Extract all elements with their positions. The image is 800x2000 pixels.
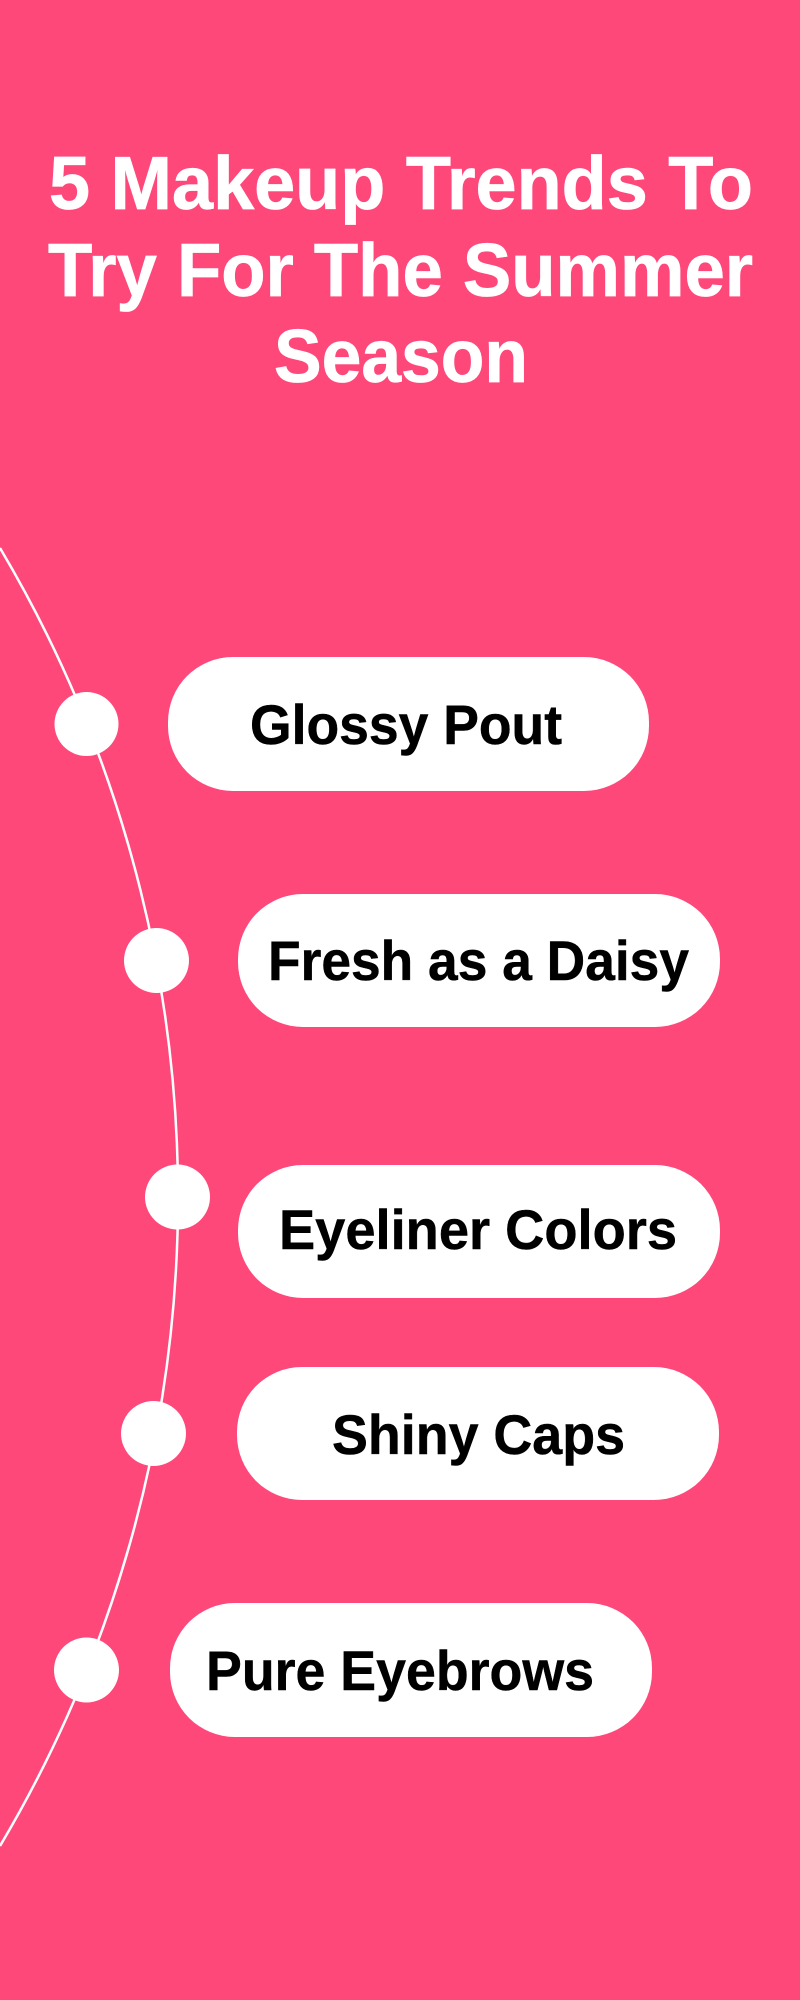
item 3: Eyeliner Colors [145, 1164, 720, 1298]
label 3: Eyeliner Colors [279, 1198, 677, 1261]
marker dot 2 [124, 928, 189, 993]
marker dot 3 [145, 1164, 210, 1230]
title: Try For The Summer [48, 228, 753, 312]
pill 1 [168, 657, 649, 791]
marker dot 1 [54, 692, 118, 756]
title: Season [274, 314, 528, 398]
label 1: Glossy Pout [250, 693, 562, 756]
label 4: Shiny Caps [332, 1403, 625, 1466]
item 4: Shiny Caps [121, 1367, 719, 1500]
marker dot 5 [54, 1638, 119, 1702]
title: 5 Makeup Trends To [49, 141, 753, 225]
item 2: Fresh as a Daisy [124, 894, 720, 1027]
curved timeline line [0, 548, 178, 1846]
label 2: Fresh as a Daisy [268, 929, 689, 992]
item 5: Pure Eyebrows [54, 1603, 652, 1737]
pill 3 [238, 1165, 720, 1298]
item 1: Glossy Pout [54, 657, 649, 791]
marker dot 4 [121, 1401, 186, 1466]
pill 2 [238, 894, 720, 1027]
title [48, 141, 753, 398]
label 5: Pure Eyebrows [206, 1639, 594, 1702]
pill 4 [237, 1367, 719, 1500]
pill 5 [170, 1603, 652, 1737]
